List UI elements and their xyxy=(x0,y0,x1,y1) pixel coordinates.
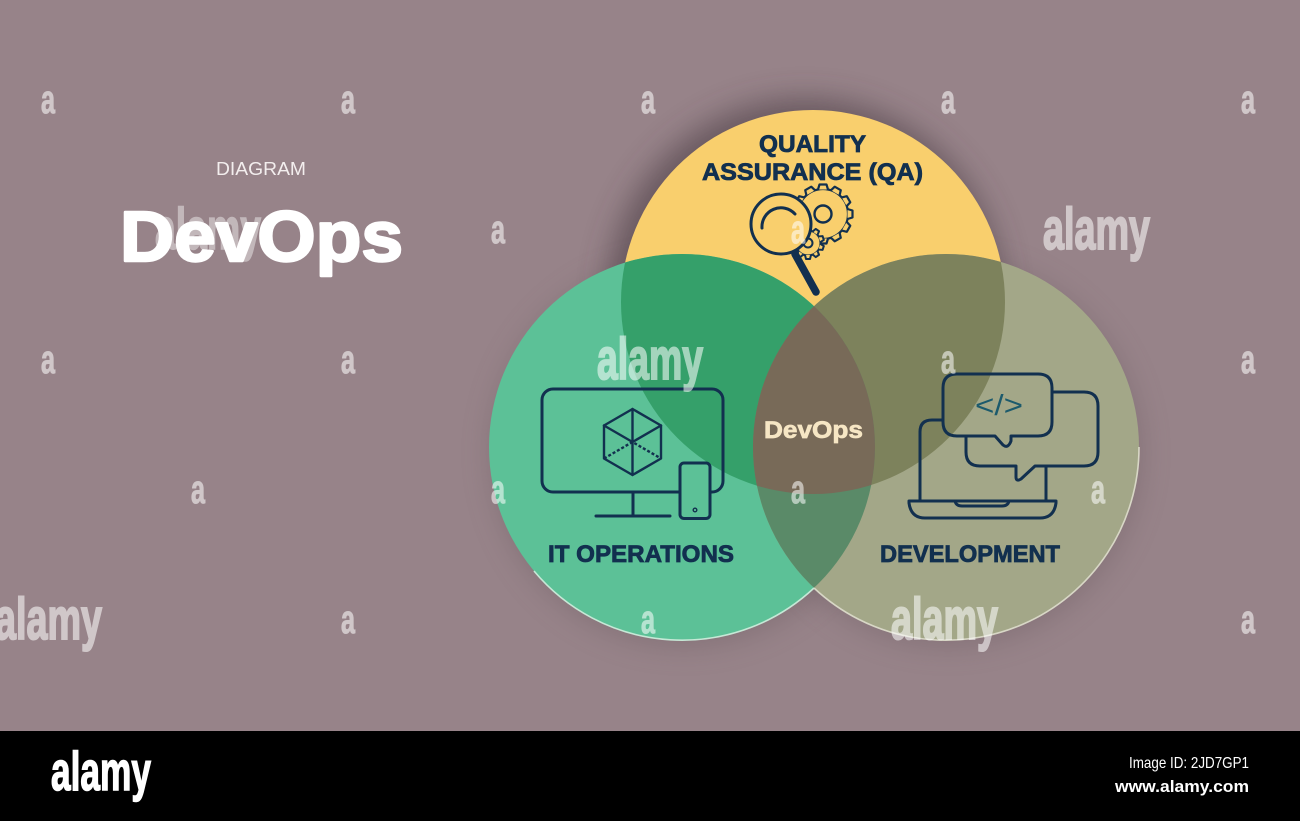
circle: it operations xyxy=(489,254,875,640)
watermark: repeated marks: a xyxy=(341,338,355,382)
watermark: repeated marks: a xyxy=(1241,338,1255,382)
watermark: alamy logos: alamy xyxy=(1043,197,1150,262)
overlap: centre devops xyxy=(753,306,875,494)
watermark: alamy logos: alamy xyxy=(891,587,998,652)
watermark: repeated marks xyxy=(41,78,1255,642)
footer bar xyxy=(0,731,1300,821)
icon: code symbol: </> xyxy=(975,390,1023,422)
lens xyxy=(751,194,811,254)
watermark: repeated marks: a xyxy=(491,208,505,252)
label: quality assurance: ASSURANCE (QA) xyxy=(702,159,923,186)
overlap: qa and it operations xyxy=(621,254,814,486)
phone xyxy=(680,463,710,518)
watermark: alamy logos: alamy xyxy=(597,327,703,392)
back speech bubble xyxy=(966,392,1098,480)
label: devops centre: DevOps xyxy=(764,417,863,444)
watermark: repeated marks: a xyxy=(191,468,205,512)
watermark: repeated marks: a xyxy=(941,78,955,122)
website: www.alamy.com xyxy=(1114,777,1249,796)
large gear xyxy=(794,184,852,244)
footer logo: alamy xyxy=(51,740,151,802)
watermark: alamy behind title: alamy xyxy=(155,197,261,262)
watermark: repeated marks: a xyxy=(491,468,505,512)
image id: Image ID: 2JD7GP1 xyxy=(1129,755,1249,772)
title: DevOps xyxy=(120,198,403,277)
icon: magnifier and gears xyxy=(751,184,852,292)
watermark: repeated marks: a xyxy=(1241,598,1255,642)
icon: monitor, cube and phone xyxy=(542,389,723,518)
laptop xyxy=(920,420,943,500)
overlap: qa and development xyxy=(753,254,1005,486)
overlap: it operations and development xyxy=(757,310,875,588)
watermark: repeated marks: a xyxy=(41,78,55,122)
watermark: repeated marks: a xyxy=(341,78,355,122)
label: quality assurance xyxy=(702,131,923,186)
small gear xyxy=(792,227,824,259)
circle shadows xyxy=(492,99,1140,645)
watermark: repeated marks: a xyxy=(1091,468,1105,512)
venn diagram xyxy=(489,110,1139,640)
watermark: repeated marks: a xyxy=(641,78,655,122)
watermark: repeated marks: a xyxy=(791,208,805,252)
circle: quality assurance xyxy=(621,110,1005,494)
watermark: repeated marks: a xyxy=(341,598,355,642)
label: development: DEVELOPMENT xyxy=(880,541,1060,568)
handle xyxy=(795,254,816,292)
label: quality assurance: QUALITY xyxy=(759,131,866,158)
heading: diagram label: DIAGRAM xyxy=(216,159,306,179)
watermark: alamy logos xyxy=(0,197,1150,652)
cube xyxy=(604,409,661,475)
label: it operations: IT OPERATIONS xyxy=(548,541,734,568)
icon: laptop with code speech bubbles xyxy=(909,374,1098,518)
watermark: repeated marks: a xyxy=(941,338,955,382)
watermark: repeated marks: a xyxy=(641,598,655,642)
front speech bubble xyxy=(943,374,1052,446)
watermark: repeated marks: a xyxy=(41,338,55,382)
watermark: repeated marks: a xyxy=(791,468,805,512)
watermark: repeated marks: a xyxy=(1241,78,1255,122)
circle: development xyxy=(753,254,1139,640)
